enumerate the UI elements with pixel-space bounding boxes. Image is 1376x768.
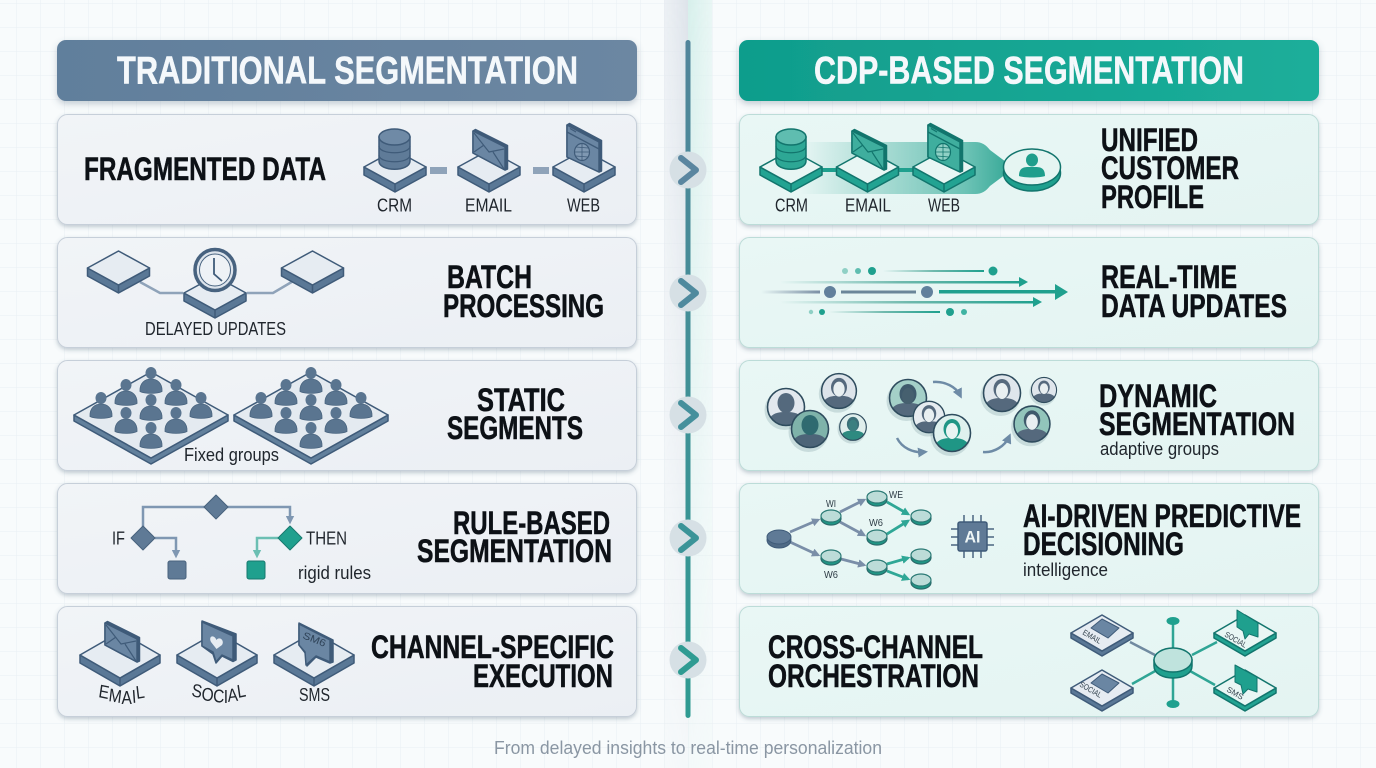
icon: sms channel: SM6 (301, 631, 328, 650)
label: email: EMAIL (465, 194, 512, 216)
heading: channel-specific execution: CHANNEL-SPECIFIC (371, 629, 614, 665)
icon: crm database (760, 129, 822, 192)
panel: real-time data updates (740, 238, 1318, 348)
label: if: IF (112, 528, 125, 548)
heading: batch processing: PROCESSING (443, 288, 604, 324)
icon: delayed batch flow (88, 250, 344, 318)
icon: orchestration hub network (1071, 610, 1276, 711)
heading: channel-specific execution: EXECUTION (473, 658, 613, 694)
heading: dynamic segmentation: SEGMENTATION (1099, 406, 1295, 442)
icon: connectors (815, 168, 920, 172)
caption: From delayed insights to real-time personalization (494, 737, 882, 758)
label: delayed updates: DELAYED UPDATES (145, 318, 286, 339)
heading: real-time data updates (1101, 259, 1287, 324)
heading: unified customer profile (1101, 122, 1239, 215)
icon: web source (553, 124, 615, 192)
panel: dynamic segmentation (740, 360, 1318, 470)
panel: fragmented data (58, 114, 636, 224)
icon: decision tree: WI (826, 499, 836, 510)
icon: email source (458, 130, 520, 192)
heading: dynamic segmentation: DYNAMIC (1099, 378, 1217, 414)
label: crm: CRM (775, 194, 808, 216)
header: traditional segmentation: TRADITIONAL SEGMENTATION (117, 50, 578, 92)
panel: unified customer profile (740, 114, 1318, 224)
heading: ai-driven predictive decisioning: DECISIONING (1023, 526, 1184, 562)
heading: real-time data updates: REAL-TIME (1101, 259, 1237, 295)
header: cdp-based segmentation: CDP-BASED SEGMENTATION (814, 50, 1244, 92)
icon: orchestration hub network: SOCIAL (1223, 630, 1249, 650)
icon: rule flowchart (131, 495, 302, 579)
heading: cross-channel orchestration (768, 629, 983, 694)
heading: real-time data updates: DATA UPDATES (1101, 288, 1287, 324)
heading: static segments (447, 382, 583, 446)
heading: static segments: STATIC (477, 382, 565, 418)
panel: ai-driven predictive decisioning (740, 484, 1318, 594)
icon: decision tree: W6 (869, 518, 883, 529)
heading: rule-based segmentation (417, 505, 612, 569)
icon: decision tree: W6 (824, 570, 838, 581)
icon: orchestration hub network: SMS (1225, 685, 1245, 702)
label: social: SOCIAL (190, 680, 247, 707)
arrow: row 1 (670, 152, 706, 188)
icon: orchestration hub network: SOCIAL (1078, 680, 1104, 700)
header: cdp-based segmentation (739, 40, 1319, 101)
icon: ai chip (951, 515, 994, 558)
heading: unified customer profile: PROFILE (1101, 179, 1204, 215)
icon: email source (836, 130, 898, 192)
heading: static segments: SEGMENTS (447, 410, 583, 446)
icon: real-time data streams (761, 266, 1068, 316)
header: traditional segmentation (57, 40, 637, 101)
icon: web source (913, 124, 975, 192)
label: email: EMAIL (97, 681, 146, 708)
label: intelligence: intelligence (1023, 559, 1108, 580)
panel: batch processing (58, 238, 636, 348)
icon: ai chip: AI (964, 528, 980, 546)
label: web: WEB (928, 194, 960, 216)
icon: sms channel (274, 623, 354, 686)
icon: email channel (80, 622, 160, 686)
icon: unified data flow band (800, 142, 1006, 194)
icon: unified customer hub (1004, 149, 1060, 191)
heading: batch processing: BATCH (447, 259, 532, 295)
icon: fixed group plate b (234, 367, 388, 464)
label: crm: CRM (377, 194, 412, 216)
heading: cross-channel orchestration: CROSS-CHANNEL (768, 629, 983, 665)
center divider with chevrons (670, 40, 706, 718)
arrow: row 5 (670, 642, 706, 678)
arrow: row 3 (670, 396, 706, 434)
heading: unified customer profile: CUSTOMER (1101, 150, 1239, 186)
icon: adaptive group avatars (764, 373, 1058, 456)
label: rigid rules: rigid rules (298, 562, 371, 583)
heading: rule-based segmentation: RULE-BASED (453, 505, 610, 541)
heading: unified customer profile: UNIFIED (1101, 122, 1198, 158)
panel: channel-specific execution (58, 606, 636, 716)
label: adaptive groups: adaptive groups (1100, 438, 1219, 459)
panel: static segments (58, 360, 636, 470)
arrows: segment movement (897, 382, 1009, 452)
label: fixed groups: Fixed groups (184, 444, 279, 465)
icon: decision tree: WE (889, 490, 903, 501)
heading: rule-based segmentation: SEGMENTATION (417, 533, 612, 569)
arrow: row 4 (670, 520, 706, 556)
heading: channel-specific execution (371, 629, 614, 694)
label: email: EMAIL (845, 194, 891, 216)
label: then: THEN (306, 528, 347, 548)
arrow: row 2 (670, 274, 706, 312)
heading: fragmented data: FRAGMENTED DATA (84, 151, 326, 187)
icon: fixed group plate a (74, 367, 228, 464)
connector: crm to email (430, 167, 447, 174)
heading: ai-driven predictive decisioning (1023, 498, 1301, 562)
icon: crm database (364, 129, 426, 192)
heading: cross-channel orchestration: ORCHESTRATION (768, 658, 979, 694)
connector: email to web (533, 167, 549, 174)
heading: batch processing (443, 259, 604, 324)
panel: rule-based segmentation (58, 484, 636, 594)
icon: decision tree (767, 490, 931, 589)
label: sms: SMS (299, 684, 330, 705)
panel: cross-channel orchestration (740, 606, 1318, 716)
icon: social channel (177, 621, 257, 686)
icon: orchestration hub network: EMAIL (1081, 628, 1103, 646)
heading: dynamic segmentation (1099, 378, 1295, 442)
label: web: WEB (567, 194, 600, 216)
